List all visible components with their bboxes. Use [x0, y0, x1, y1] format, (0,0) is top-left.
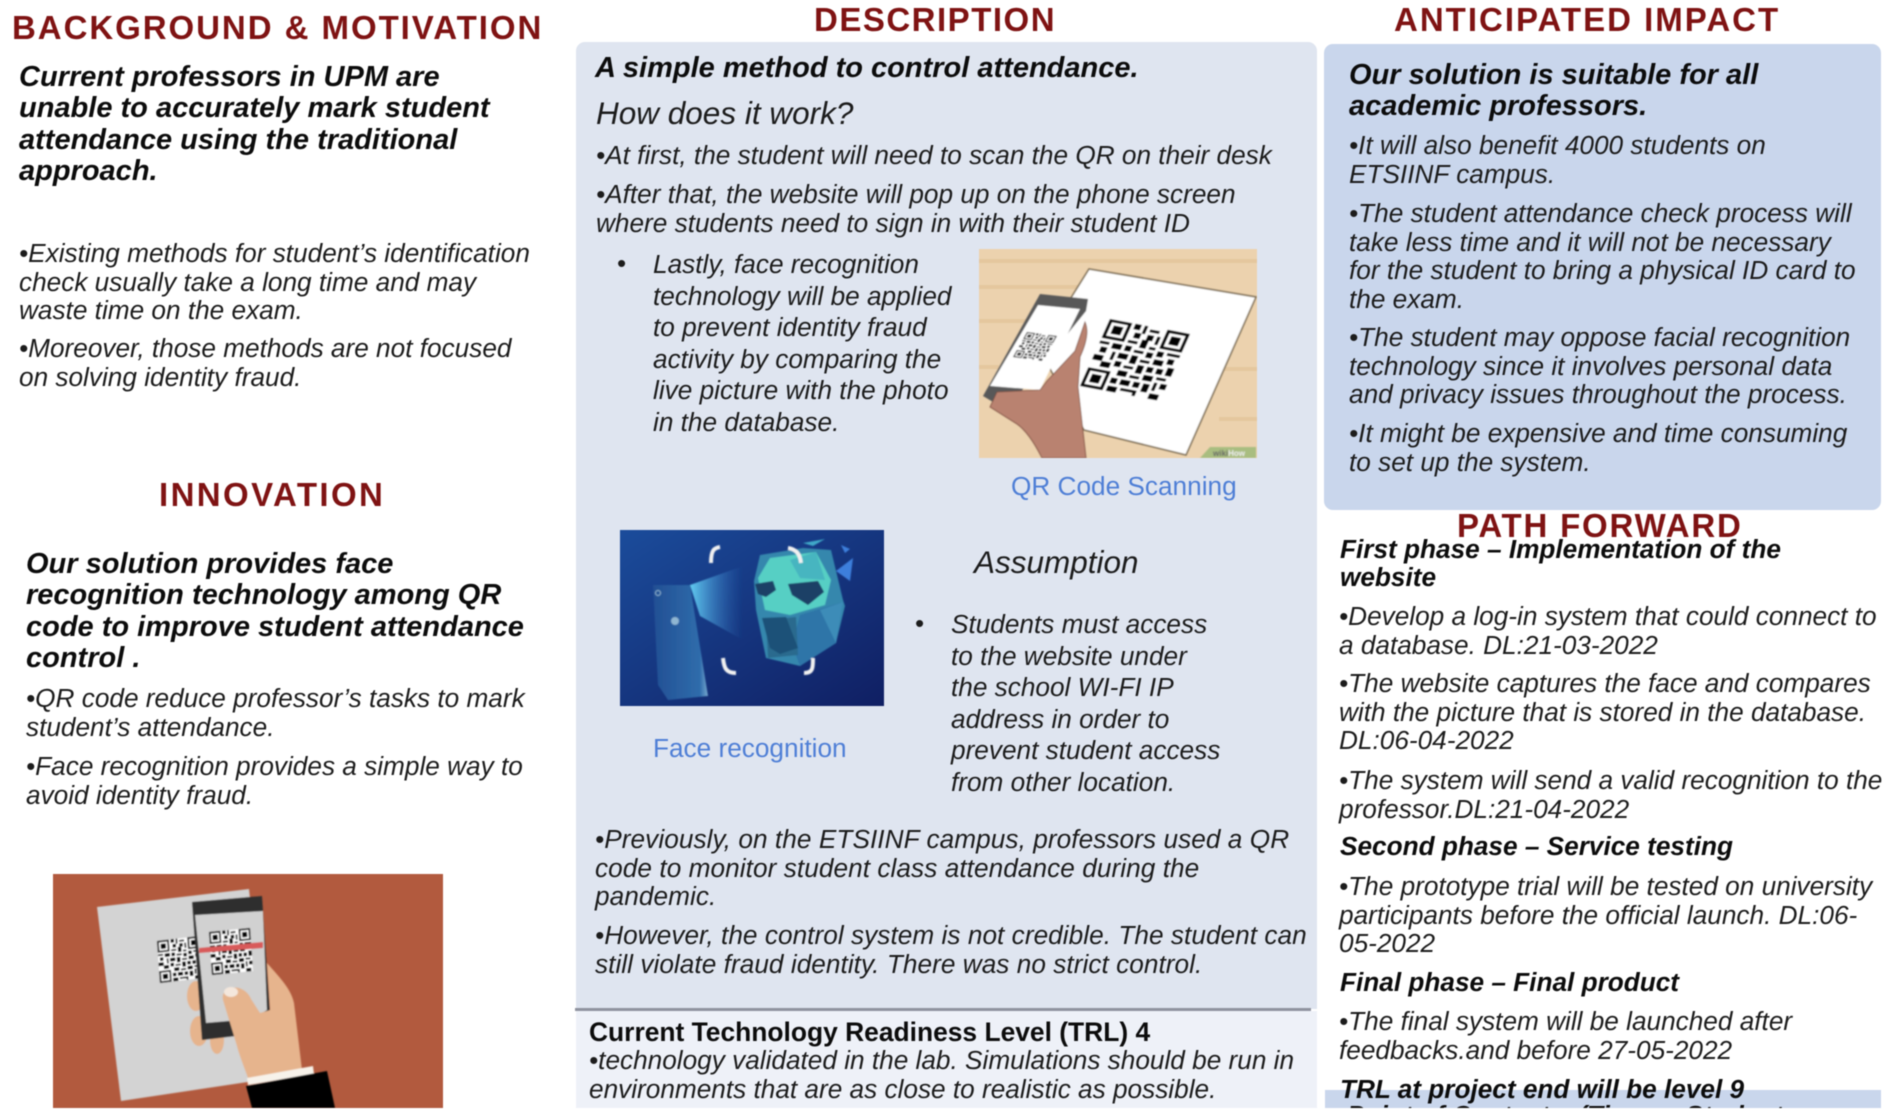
text: login milestone: •Develop a log-in system that could connect to — [1339, 601, 1877, 631]
caption: QR code scanning: QR Code Scanning — [1011, 471, 1237, 501]
heading: anticipated impact: ANTICIPATED IMPACT — [1394, 1, 1780, 38]
text: less time: take less time and it will not be necessary — [1349, 226, 1831, 256]
text: face capture milestone: with the picture that is stored in the database. — [1339, 696, 1866, 726]
text: QR code bullet: •QR code reduce professor’s tasks to mark — [26, 683, 525, 713]
text: assumption body: the school WI-FI IP — [951, 672, 1174, 702]
text: third step: activity by comparing the — [653, 344, 941, 374]
text: identity fraud bullet: on solving identity fraud. — [19, 362, 301, 392]
text: assumption body: Students must access — [951, 609, 1207, 639]
text: previous QR use: code to monitor student class attendance during the — [595, 852, 1199, 882]
text: face capture milestone: •The website captures the face and compares — [1339, 668, 1871, 698]
text: final phase title: Final phase – Final product — [1340, 967, 1679, 997]
jacket sleeve — [246, 1071, 335, 1108]
text: cost risk — [1349, 418, 1848, 478]
corner brackets — [711, 547, 813, 673]
paper sheet — [1039, 269, 1256, 455]
panel: anticipated impact background — [1324, 44, 1881, 510]
text: assumption body: from other location. — [951, 766, 1175, 796]
shirt cuff — [247, 1066, 314, 1085]
paper QR code — [1080, 319, 1190, 401]
text: less time: the exam. — [1349, 284, 1464, 314]
text: existing methods bullet — [19, 238, 530, 325]
text: third step — [652, 249, 953, 436]
text: QR code bullet: student’s attendance. — [26, 712, 274, 742]
text: impact statement — [1348, 59, 1760, 122]
hand — [990, 322, 1087, 458]
illustration: face recognition scan — [619, 529, 885, 707]
text: first phase title: website — [1340, 562, 1436, 592]
text: prototype trial milestone: 05-2022 — [1339, 928, 1435, 958]
illustration: hand scanning QR code on paper — [52, 873, 444, 1109]
phone screen — [195, 911, 267, 1023]
text: innovation statement — [26, 548, 524, 674]
text: QR code bullet — [26, 683, 526, 742]
heading: innovation: INNOVATION — [159, 476, 385, 513]
illustration: phone scanning QR code on desk — [978, 248, 1258, 459]
text: face recognition bullet — [26, 751, 523, 810]
red scan line — [199, 942, 263, 953]
text: final launch milestone: •The final system will be launched after — [1339, 1006, 1792, 1036]
phone — [653, 585, 708, 700]
text: control system weakness: still violate fraud identity. There was no strict control. — [595, 948, 1202, 978]
text: bullet for third step: • — [617, 248, 626, 278]
text: innovation statement: Our solution provides face — [26, 548, 393, 580]
text: current TRL body — [589, 1045, 1294, 1104]
text: less time — [1349, 198, 1856, 314]
light beam — [690, 566, 743, 640]
caption: face recognition: Face recognition — [653, 733, 847, 763]
text: valid recognition milestone — [1338, 765, 1882, 824]
text: valid recognition milestone: professor.DL:21-04-2022 — [1339, 794, 1629, 824]
text: final TRL: TRL at project end will be level 9 — [1340, 1074, 1744, 1104]
text: privacy risk: •The student may oppose facial recognition — [1349, 322, 1850, 352]
phone QR code — [1013, 332, 1057, 361]
text: prototype trial milestone: participants before the official launch. DL:06- — [1339, 900, 1857, 930]
paper — [97, 889, 268, 1101]
text: prototype trial milestone — [1338, 871, 1874, 958]
text: assumption body — [950, 609, 1220, 796]
text: first phase title — [1340, 534, 1781, 592]
text: bullet for assumption: • — [915, 608, 924, 638]
text: innovation statement: recognition technology among QR — [26, 579, 501, 611]
text: background problem statement: Current professors in UPM are — [19, 61, 440, 93]
text: innovation statement: control . — [26, 642, 140, 674]
text: previous QR use: •Previously, on the ETSIINF campus, professors used a QR — [595, 824, 1289, 854]
text: description title: A simple method to control attendance. — [595, 52, 1139, 84]
text: existing methods bullet: waste time on the exam. — [19, 295, 303, 325]
panel: description background — [576, 42, 1317, 1009]
text: less time: •The student attendance check process will — [1349, 198, 1852, 228]
text: innovation statement: code to improve student attendance — [26, 611, 524, 643]
text: second step — [596, 179, 1236, 238]
text: background problem statement: attendance using the traditional — [19, 124, 457, 156]
heading: background and motivation: BACKGROUND & MOTIVATION — [12, 9, 543, 46]
text: impact statement: Our solution is suitable for all — [1349, 59, 1758, 91]
text: second step: •After that, the website will pop up on the phone screen — [596, 179, 1236, 209]
panel: point of contact background — [1325, 1090, 1881, 1108]
text: identity fraud bullet — [19, 333, 513, 392]
text: students benefit — [1349, 130, 1766, 190]
nose and mouth shadow — [762, 617, 798, 654]
outer triangles — [836, 558, 853, 581]
text: current TRL body: environments that are as close to realistic as possible. — [589, 1074, 1216, 1104]
text: privacy risk: technology since it involves personal data — [1349, 350, 1832, 380]
phone — [983, 294, 1088, 402]
text: current TRL heading: Current Technology Readiness Level (TRL) 4 — [589, 1017, 1150, 1047]
hand — [223, 963, 302, 1078]
text: prototype trial milestone: •The prototype trial will be tested on university — [1339, 871, 1872, 901]
text: assumption body: to the website under — [951, 640, 1187, 670]
text: identity fraud bullet: •Moreover, those methods are not focused — [19, 333, 511, 363]
text: assumption heading: Assumption — [974, 544, 1139, 580]
heading: path forward: PATH FORWARD — [1457, 507, 1743, 544]
text: face recognition bullet: avoid identity fraud. — [26, 780, 253, 810]
text: previous QR use: pandemic. — [595, 881, 716, 911]
phone body — [192, 896, 270, 1040]
text: third step: Lastly, face recognition — [653, 249, 919, 279]
text: face recognition bullet: •Face recognition provides a simple way to — [26, 751, 523, 781]
text: third step: technology will be applied — [653, 280, 951, 310]
text: privacy risk — [1348, 322, 1850, 410]
text: second step: where students need to sign in with their student ID — [596, 208, 1190, 238]
text: previous QR use — [594, 824, 1290, 912]
text: existing methods bullet: check usually take a long time and may — [19, 266, 476, 296]
text: current TRL body: •technology validated in the lab. Simulations should be run in — [589, 1045, 1294, 1075]
text: impact statement: academic professors. — [1349, 90, 1647, 122]
text: privacy risk: and privacy issues throughout the process. — [1349, 379, 1847, 409]
face mesh — [754, 548, 845, 666]
text: third step: to prevent identity fraud — [653, 312, 927, 342]
eyes — [755, 581, 776, 597]
text: valid recognition milestone: •The system will send a valid recognition to the — [1339, 765, 1882, 795]
text: face capture milestone — [1339, 668, 1871, 755]
text: how does it work: How does it work? — [596, 95, 853, 131]
divider line above technology readiness — [575, 1008, 1311, 1011]
text: background problem statement — [18, 61, 492, 187]
text: students benefit: •It will also benefit 4000 students on — [1349, 130, 1766, 160]
text: assumption body: prevent student access — [951, 735, 1220, 765]
text: final launch milestone: feedbacks.and before 27-05-2022 — [1339, 1034, 1732, 1064]
fingers behind phone — [187, 981, 205, 1011]
text: background problem statement: unable to accurately mark student — [19, 92, 490, 124]
panel: technology readiness background — [576, 1011, 1317, 1108]
text: less time: for the student to bring a physical ID card to — [1349, 255, 1856, 285]
wikiHow mark: wikiHow — [1212, 449, 1246, 458]
text: control system weakness: •However, the control system is not credible. The student can — [595, 920, 1307, 950]
paper QR code — [157, 936, 202, 983]
text: control system weakness — [594, 920, 1307, 980]
text: second phase title: Second phase – Service testing — [1340, 831, 1733, 861]
text: login milestone — [1338, 601, 1877, 660]
text: third step: in the database. — [653, 406, 839, 436]
text: cost risk: •It might be expensive and time consuming — [1349, 418, 1847, 448]
wikiHow mark — [1200, 447, 1256, 458]
text: assumption body: address in order to — [951, 704, 1169, 734]
text: background problem statement: approach. — [19, 155, 158, 187]
text: first step: •At first, the student will need to scan the QR on their desk — [596, 140, 1272, 170]
text: existing methods bullet: •Existing methods for student’s identification — [19, 238, 530, 268]
phone QR code — [209, 928, 253, 975]
text: first phase title: First phase – Implementation of the — [1340, 534, 1781, 564]
text: final launch milestone — [1339, 1006, 1794, 1064]
text: third step: live picture with the photo — [653, 375, 949, 405]
text: face capture milestone: DL:06-04-2022 — [1339, 725, 1514, 755]
text: students benefit: ETSIINF campus. — [1349, 158, 1555, 188]
heading: description: DESCRIPTION — [814, 1, 1056, 38]
text: cost risk: to set up the system. — [1349, 446, 1591, 476]
text: login milestone: a database. DL:21-03-2022 — [1339, 630, 1658, 660]
